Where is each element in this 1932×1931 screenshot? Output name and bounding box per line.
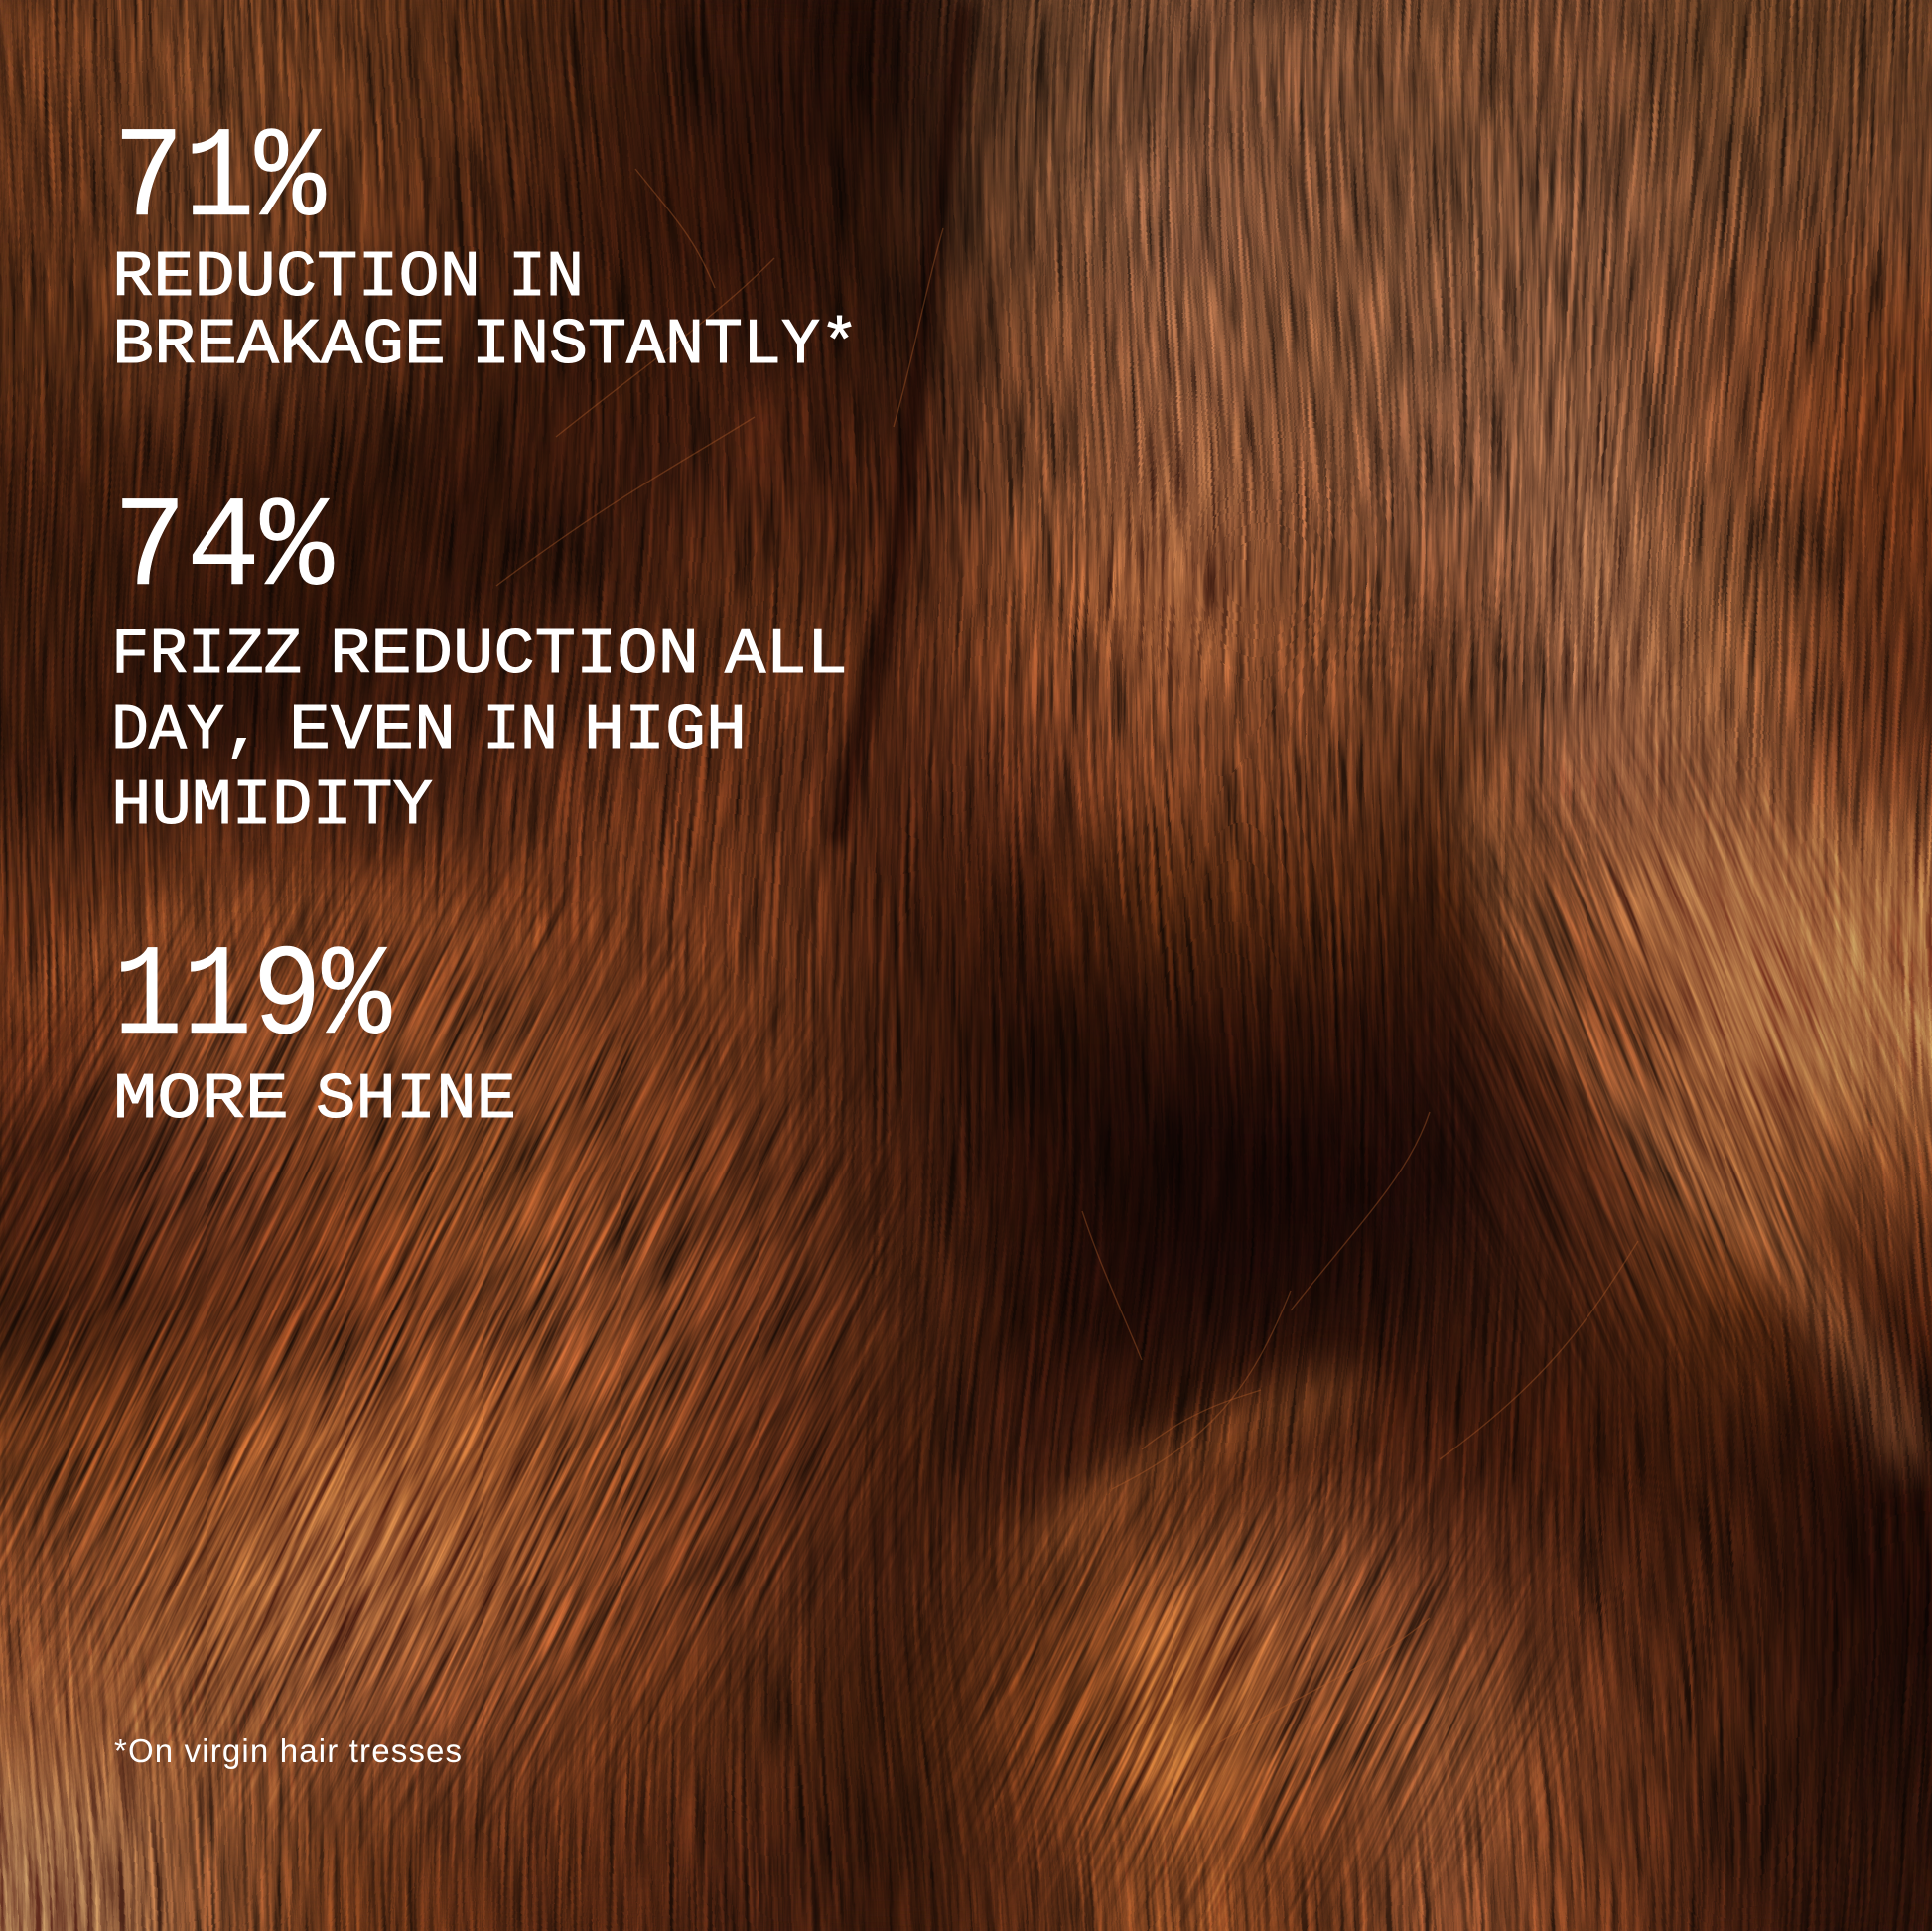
stat description: more shine: SHINE bbox=[316, 1063, 516, 1137]
stat description: frizz reduction: ALL bbox=[725, 619, 848, 692]
footnote: *On virgin hair tresses bbox=[114, 1732, 462, 1769]
stat block: 119% bbox=[113, 926, 516, 1137]
stat description: frizz reduction: IN bbox=[483, 694, 558, 767]
stat number: 119%: 119% bbox=[113, 926, 392, 1072]
stat description: frizz reduction: HUMIDITY bbox=[111, 769, 433, 843]
stat description: reduction in breakage bbox=[112, 241, 859, 382]
stat description: frizz reduction: EVEN bbox=[289, 694, 456, 767]
stat block: 71% bbox=[112, 108, 859, 382]
stat description: reduction in breakage: IN bbox=[508, 241, 584, 315]
stat number: 74%: 74% bbox=[113, 478, 335, 623]
stat description: reduction in breakage: BREAKAGE bbox=[112, 309, 446, 382]
stat description: frizz reduction: HIGH bbox=[584, 694, 747, 767]
stat description: frizz reduction bbox=[111, 619, 848, 843]
stat description: frizz reduction: DAY, bbox=[111, 694, 262, 767]
stat number: 71%: 71% bbox=[113, 108, 327, 254]
stat description: reduction in breakage: INSTANTLY* bbox=[472, 309, 859, 382]
stat description: frizz reduction: FRIZZ bbox=[111, 619, 302, 692]
stat description: reduction in breakage: REDUCTION bbox=[112, 241, 481, 315]
stat block: 74% bbox=[111, 478, 848, 843]
stat description: more shine bbox=[113, 1063, 516, 1137]
stat description: frizz reduction: REDUCTION bbox=[330, 619, 699, 692]
stat description: more shine: MORE bbox=[113, 1063, 289, 1137]
